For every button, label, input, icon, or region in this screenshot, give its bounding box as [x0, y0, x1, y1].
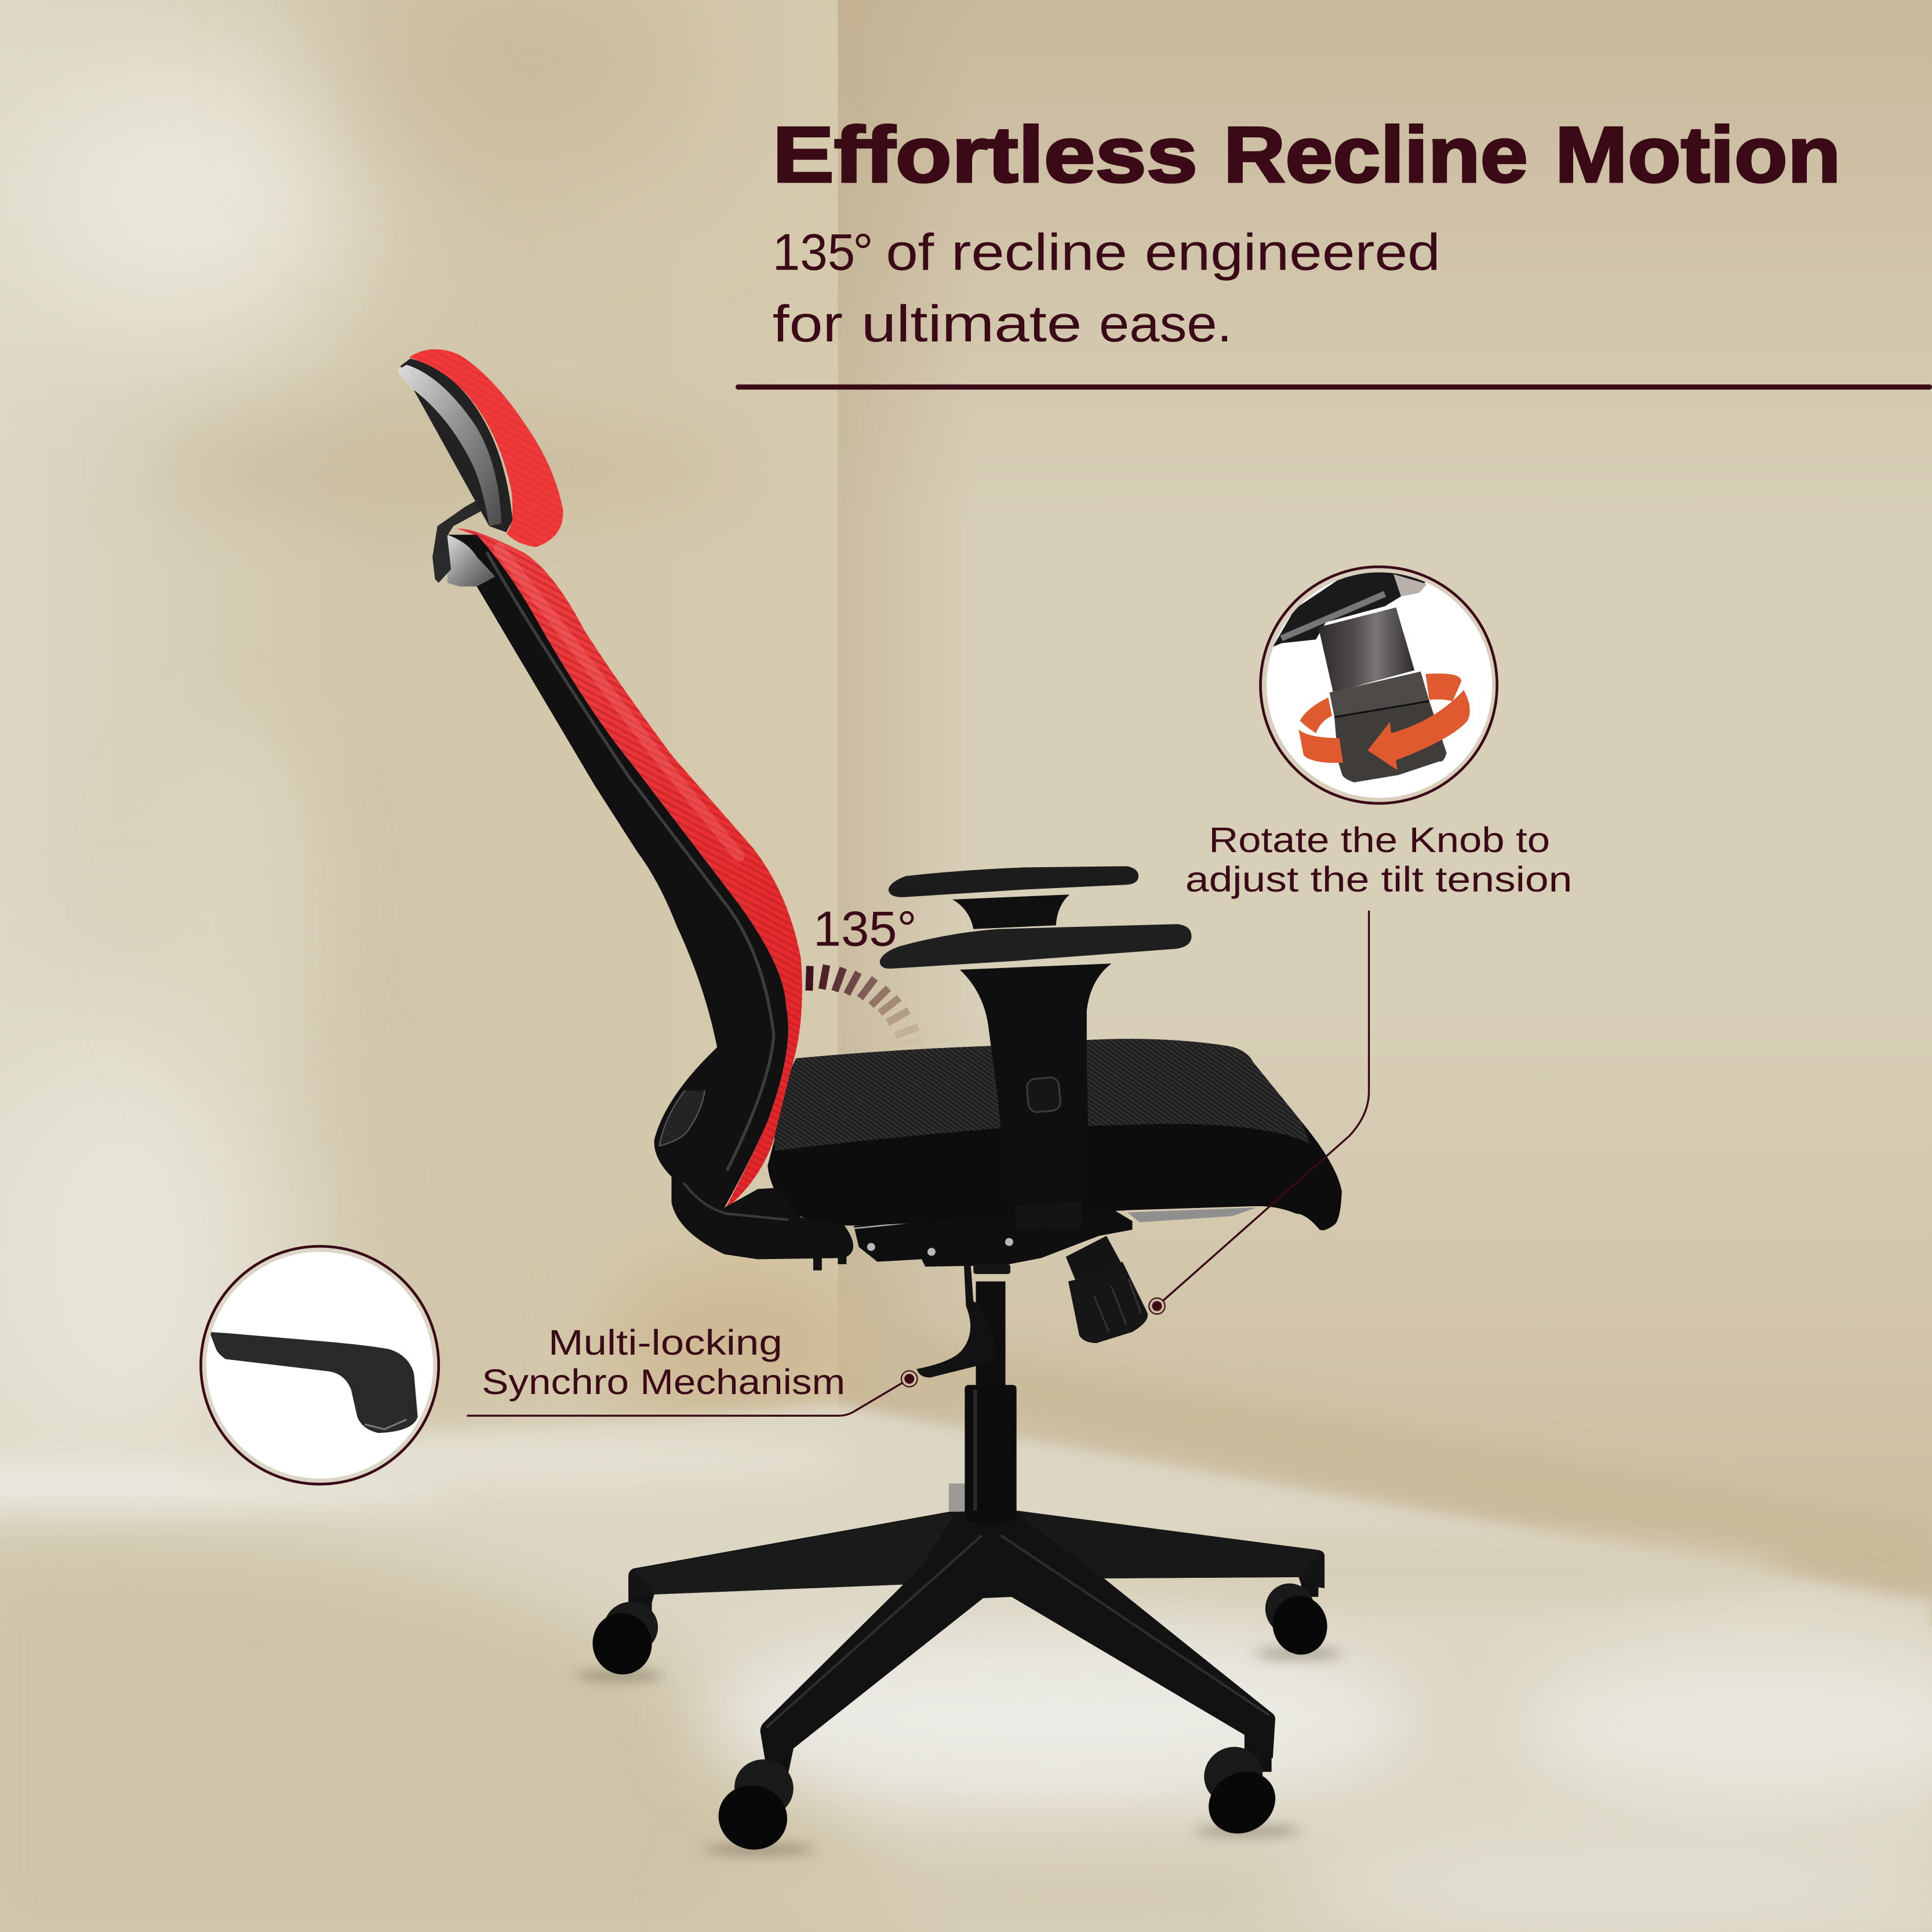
title: Motion: [1555, 111, 1841, 199]
subtitle text: 135: [773, 223, 855, 281]
subtitle text: [773, 223, 1440, 352]
callout: 135 degree angle label: 135: [813, 901, 897, 956]
subtitle text: ease.: [1099, 294, 1232, 352]
callout text: synchro mechanism: [482, 1323, 845, 1402]
subtitle text: engineered: [1145, 223, 1440, 281]
callout: synchro mechanism lever: [201, 1246, 918, 1484]
callout text: rotate knob: Rotate the Knob to: [1209, 820, 1550, 860]
chair recline lever: [916, 1232, 997, 1377]
title: Recline: [1224, 111, 1528, 199]
chair headrest: [398, 350, 563, 583]
title: [773, 111, 1841, 199]
chair illustration: [398, 350, 1342, 1857]
recline arc ticks: [809, 965, 921, 1046]
chair base: five-star legs: [628, 1483, 1325, 1772]
chair tension knob: [1066, 1236, 1148, 1343]
callout leader line: lever: [467, 1371, 918, 1416]
callout text: synchro mechanism: Synchro Mechanism: [482, 1362, 845, 1402]
header divider rule: [736, 384, 1932, 390]
caster shadows: [576, 1649, 1343, 1854]
inset circle: lever handle: [201, 1246, 439, 1484]
callout: tilt tension knob: [1149, 565, 1572, 1314]
callout: 135 degree angle label: °: [897, 901, 916, 956]
inset circle: tension knob: [1261, 565, 1497, 803]
chair seat cushion: [767, 1039, 1342, 1230]
callout text: synchro mechanism: Multi-locking: [548, 1323, 783, 1363]
title: Effortless: [773, 111, 1198, 199]
subtitle text: for: [773, 294, 843, 352]
subtitle text: recline: [951, 223, 1127, 281]
callout leader line: knob: [1149, 911, 1369, 1314]
subtitle text: ultimate: [861, 294, 1082, 352]
subtitle text: of: [886, 223, 934, 281]
subtitle text: °: [853, 223, 874, 281]
chair armrests: [880, 866, 1191, 1228]
chair under-seat mechanism: [813, 1210, 1132, 1274]
callout text: rotate knob: adjust the tilt tension: [1185, 860, 1572, 900]
chair gas cylinder: [965, 1282, 1017, 1524]
chair black back frame: [447, 535, 853, 1259]
chair casters: [588, 1578, 1334, 1857]
callout text: rotate knob: [1185, 820, 1572, 900]
chair red mesh backrest: [457, 529, 802, 1210]
